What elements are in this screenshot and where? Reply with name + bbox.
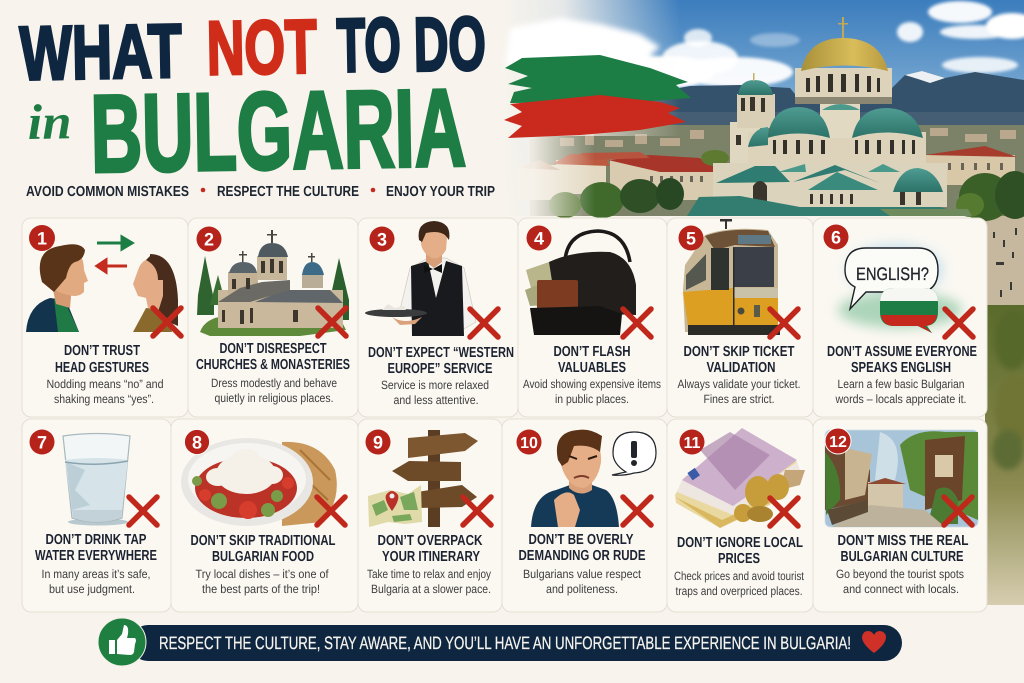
icon: signpost and map (368, 430, 478, 527)
description (42, 567, 150, 596)
clouds (625, 1, 1024, 88)
heading: DON’T ASSUME EVERYONE (827, 344, 977, 360)
description: words – locals appreciate it. (835, 392, 966, 406)
icon: salad bowl and bread (181, 438, 337, 526)
description: and politeness. (546, 582, 618, 596)
icon: yellow tram (683, 219, 780, 335)
x mark (153, 308, 181, 336)
description (835, 377, 966, 406)
number badge: 2 (204, 230, 214, 250)
number badge: 8 (192, 432, 202, 452)
panel: 11 prices (667, 419, 813, 612)
heading: DON’T TRUST (64, 343, 140, 359)
right edge photo strip: plaza and trees (985, 215, 1024, 605)
heading: DON’T DRINK TAP (46, 532, 147, 548)
description: Take time to relax and enjoy (367, 567, 491, 581)
description: traps and overpriced places. (676, 584, 802, 598)
heading: DON’T EXPECT “WESTERN (368, 345, 514, 361)
heading: BULGARIAN CULTURE (840, 549, 964, 565)
description: and less attentive. (394, 393, 478, 407)
flag brush stroke (504, 18, 691, 138)
x mark (770, 498, 798, 526)
x mark (944, 497, 972, 525)
description: Bulgaria at a slower pace. (371, 582, 491, 596)
number badge: 1 (37, 228, 47, 248)
heading: PRICES (718, 551, 760, 567)
number badge (678, 226, 704, 250)
description: Go beyond the tourist spots (836, 567, 964, 581)
description (367, 567, 491, 596)
x mark (623, 497, 651, 525)
number badge (680, 430, 704, 454)
number badge: 6 (831, 228, 841, 248)
number badge (30, 430, 54, 454)
description: the best parts of the trip! (202, 582, 320, 596)
title: in (27, 93, 72, 150)
icon: church (197, 230, 349, 336)
heading (196, 341, 350, 373)
description: Service is more relaxed (381, 378, 489, 392)
description (381, 378, 489, 407)
tagline: ENJOY YOUR TRIP (386, 184, 495, 200)
description (523, 567, 642, 596)
description: shaking means “yes”. (54, 392, 154, 406)
description (674, 569, 805, 598)
number badge (184, 430, 210, 454)
cathedral teal domes (767, 107, 830, 138)
title: DO (413, 1, 486, 88)
title: WHAT (19, 9, 183, 97)
heading (827, 344, 977, 376)
number badge: 12 (829, 434, 847, 451)
heading: DEMANDING OR RUDE (518, 548, 646, 564)
heading (190, 533, 336, 565)
cathedral base roof (687, 196, 972, 216)
description: In many areas it’s safe, (42, 567, 150, 581)
cathedral lower section (713, 163, 947, 207)
number badge (825, 428, 851, 454)
description (523, 377, 661, 406)
number badge: 11 (684, 435, 701, 452)
cathedral upper drum (795, 68, 892, 104)
icon: man and woman facing each other (26, 244, 178, 332)
heading: DON’T IGNORE LOCAL (677, 535, 803, 551)
heading: DON’T SKIP TICKET (684, 344, 795, 360)
heading (684, 344, 795, 376)
heading (518, 532, 646, 564)
panel: 8 food (171, 419, 358, 612)
heading: BULGARIAN FOOD (212, 549, 314, 565)
icon: thumbs up (98, 618, 146, 666)
heading (368, 345, 514, 377)
icon: heart (862, 631, 886, 653)
panel: 6 english (813, 218, 987, 417)
heading: DON’T OVERPACK (378, 533, 483, 549)
heading: DON’T BE OVERLY (528, 532, 634, 548)
arrow: red left (97, 260, 127, 272)
panel: 2 churches (188, 218, 358, 417)
panel: 9 itinerary (358, 419, 502, 612)
title (19, 1, 488, 197)
title: TO (336, 2, 401, 89)
number badge (29, 225, 55, 251)
heading (378, 533, 483, 565)
panel: 12 culture (813, 419, 987, 612)
description: quietly in religious places. (214, 391, 334, 405)
panel: 3 service (358, 218, 518, 417)
heading: DON’T DISRESPECT (220, 341, 327, 357)
number badge (196, 226, 222, 252)
icon: waiter with tray (365, 221, 476, 336)
number badge (366, 430, 390, 454)
heading (554, 344, 630, 376)
city (530, 125, 1024, 216)
icon: frustrated man with exclamation bubble (531, 430, 656, 527)
panel: 1 head gestures (22, 218, 188, 417)
x mark (463, 497, 491, 525)
description: Bulgarians value respect (523, 567, 642, 581)
cathedral middle section (748, 132, 926, 166)
cathedral left bell tower (730, 73, 775, 168)
arrow: green right (97, 237, 132, 249)
icon: speech bubbles with flag: ENGLISH? (856, 264, 929, 284)
description (46, 377, 164, 406)
x mark (318, 308, 346, 336)
heading (838, 533, 969, 565)
heading: YOUR ITINERARY (382, 549, 480, 565)
heading: CHURCHES & MONASTERIES (196, 357, 350, 373)
number badge: 7 (37, 432, 47, 452)
heading: EUROPE” SERVICE (388, 361, 493, 377)
number badge (516, 430, 542, 454)
x mark (945, 309, 973, 337)
icon: bag with wallet and cash (525, 231, 636, 335)
panel: 10 rude (502, 419, 667, 612)
icon: old town street scene (825, 430, 978, 527)
tagline: RESPECT THE CULTURE (217, 184, 359, 200)
description (678, 377, 800, 406)
cathedral gold dome (801, 38, 888, 71)
mountains (640, 71, 1024, 135)
number badge (370, 226, 394, 252)
description (836, 567, 964, 596)
icon: glass of water (63, 434, 130, 526)
header photo: Alexander Nevsky cathedral and Sofia skyline (500, 0, 1024, 221)
heading: HEAD GESTURES (55, 360, 149, 376)
number badge: 4 (534, 228, 544, 248)
description: and connect with locals. (843, 582, 959, 596)
x mark (470, 309, 498, 337)
heading (35, 532, 157, 564)
heading: DON’T SKIP TRADITIONAL (190, 533, 336, 549)
x mark (623, 309, 651, 337)
closing banner (98, 618, 902, 666)
icon: speech bubbles with flag (838, 244, 962, 333)
title: BULGARIA (90, 66, 467, 196)
description: in public places. (555, 392, 629, 406)
x mark (317, 497, 345, 525)
description: but use judgment. (49, 582, 135, 596)
description: Always validate your ticket. (678, 377, 800, 391)
description (211, 376, 337, 405)
number badge: 5 (686, 228, 696, 248)
description: Check prices and avoid tourist (674, 569, 805, 583)
heading: VALUABLES (558, 360, 626, 376)
tagline: AVOID COMMON MISTAKES (26, 184, 189, 200)
x mark (770, 309, 798, 337)
heading: SPEAKS ENGLISH (851, 360, 951, 376)
heading: WATER EVERYWHERE (35, 548, 157, 564)
description: Fines are strict. (704, 392, 774, 406)
description (196, 567, 329, 596)
title: NOT (206, 4, 317, 91)
panel: 5 ticket (667, 218, 813, 417)
icon: euro notes and coins (675, 428, 805, 528)
description: Avoid showing expensive items (523, 377, 661, 391)
heading: DON’T FLASH (554, 344, 630, 360)
number badge: 3 (377, 230, 387, 250)
number badge: 10 (520, 435, 538, 452)
description: Try local dishes – it’s one of (196, 567, 329, 581)
heading: VALIDATION (706, 360, 776, 376)
number badge: 9 (373, 432, 383, 452)
panel: 4 valuables (518, 218, 667, 417)
heading: DON’T MISS THE REAL (838, 533, 969, 549)
heading (677, 535, 803, 567)
panel: 7 tap water (22, 419, 171, 612)
number badge (526, 226, 552, 250)
heading (55, 343, 149, 376)
left fade (500, 0, 680, 216)
number badge (824, 224, 848, 250)
description: Learn a few basic Bulgarian (838, 377, 964, 391)
description: Dress modestly and behave (211, 376, 337, 390)
description: Nodding means “no” and (46, 377, 164, 391)
x mark (129, 497, 157, 525)
tagline (26, 184, 495, 200)
